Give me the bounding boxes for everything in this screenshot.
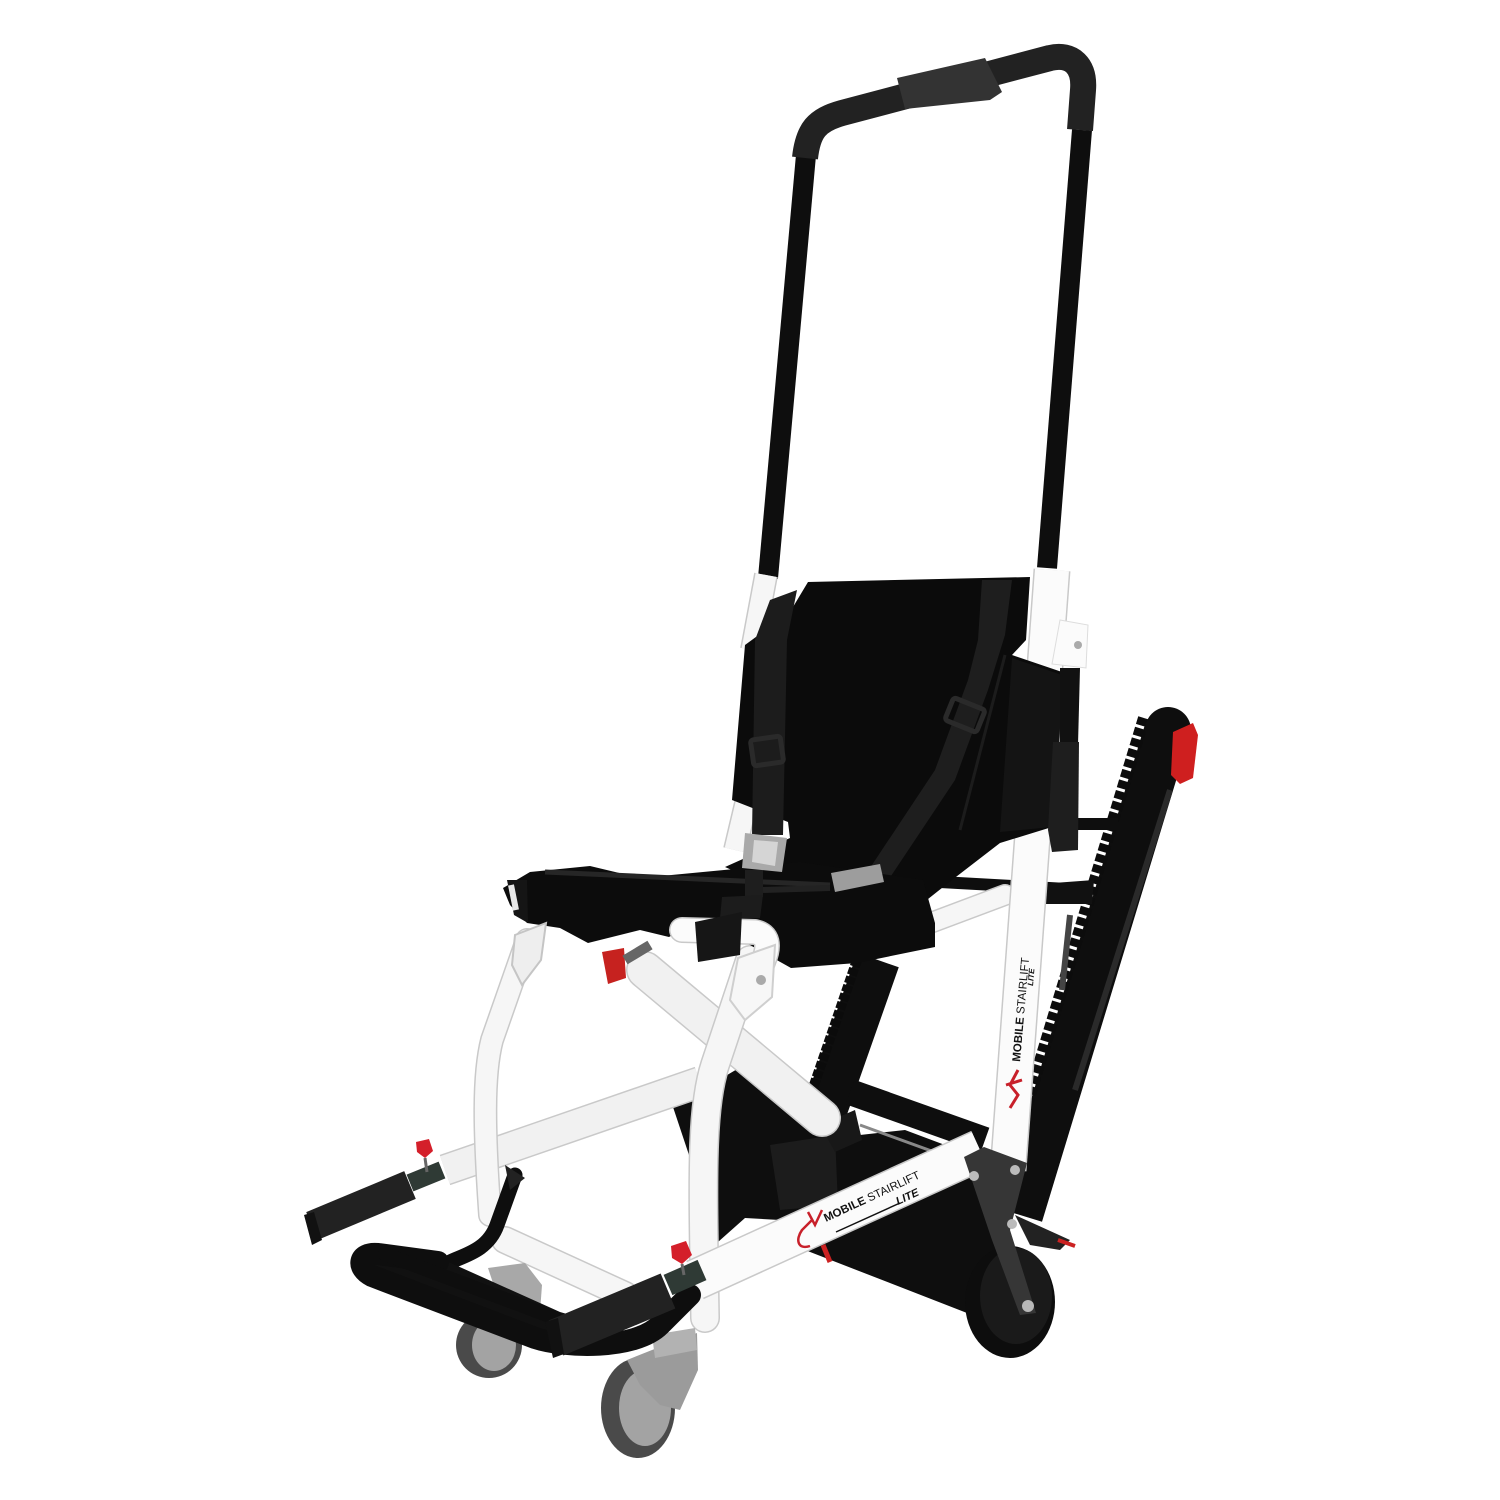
right caster (601, 1358, 675, 1458)
red seat release lever (602, 945, 650, 984)
rear wheel bracket and wheel (964, 1147, 1075, 1358)
mount plate (1052, 620, 1088, 668)
front stair track (802, 960, 985, 1140)
front seat tube and brackets (507, 880, 775, 1020)
scissor strut (645, 970, 822, 1118)
rear stair track (998, 707, 1198, 1215)
right harness strap (862, 580, 1012, 885)
rail branding (798, 1170, 922, 1247)
frame branding on post: LITE (1026, 967, 1037, 986)
right main rail (695, 1150, 980, 1280)
rear post left (752, 575, 766, 650)
backrest cushion (725, 577, 1080, 903)
base plate and motor (673, 1068, 1005, 1320)
right hand grip (545, 1270, 702, 1358)
right front leg (703, 960, 750, 1318)
foot rest (361, 1165, 690, 1345)
red track latch (1171, 723, 1198, 784)
left hand grip (304, 1170, 442, 1245)
telescopic push handle (768, 57, 1083, 578)
red lock knobs (416, 1139, 692, 1275)
seat cushion (503, 862, 935, 968)
frame branding on post: MOBILE STAIRLIFT (1011, 957, 1032, 1062)
logo mark (798, 1210, 822, 1247)
left harness strap (752, 590, 797, 835)
strap buckles (750, 736, 784, 766)
left front leg (485, 940, 527, 1215)
rear cross bars (940, 824, 1118, 990)
rail branding: LITE (894, 1186, 921, 1208)
front strap (695, 912, 742, 962)
left caster (456, 1312, 522, 1378)
left lower rail (445, 1082, 700, 1170)
side bar (1060, 668, 1080, 745)
front lower crossbar (505, 1240, 625, 1295)
front casters (456, 1263, 698, 1458)
frame branding on post (1006, 957, 1037, 1108)
seat belt latches (720, 833, 884, 918)
rear post right (1008, 570, 1052, 1170)
white frame (445, 570, 1088, 1318)
rear seat strut (925, 895, 1005, 925)
rail branding: MOBILE STAIRLIFT (822, 1170, 922, 1225)
